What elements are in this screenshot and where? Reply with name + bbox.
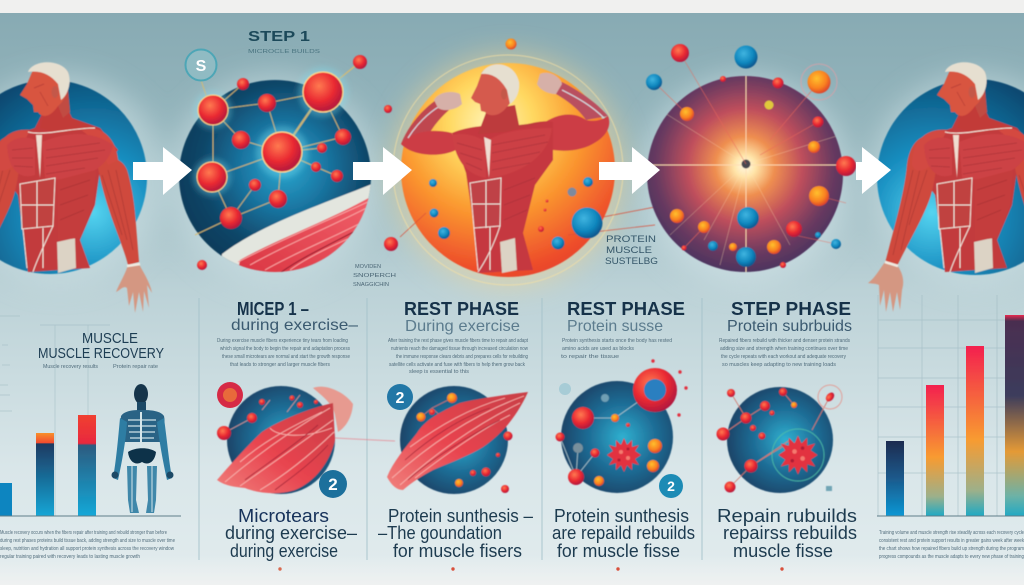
cell circle: [716, 385, 842, 493]
cell circle: [556, 359, 688, 493]
arrow 4: [856, 147, 891, 194]
chart subtitle: Protein repair rate: [113, 364, 158, 370]
text: protein label: [605, 234, 658, 266]
caption: during exercise: [230, 541, 338, 561]
arrow 2: [353, 147, 412, 195]
body text: nutrients reach the damaged tissue through increased circulation now: [391, 346, 528, 352]
icon: number badge: 2: [667, 478, 675, 494]
grid: [0, 316, 110, 516]
caption: [378, 506, 533, 561]
text: small label under network: [353, 264, 396, 288]
panel: burst circle with proteins: [646, 44, 856, 272]
dot: [451, 567, 455, 571]
left flexed arm: [401, 92, 462, 155]
subheading: Protein subrbuids: [727, 318, 852, 335]
caption: Repain rubuilds: [717, 506, 857, 526]
body text: that leads to stronger and larger muscle fibers: [230, 362, 330, 368]
text: small label under network: SNAGGICHIN: [353, 282, 389, 288]
caption: Protein sunthesis –: [388, 506, 533, 526]
caption: during exercise–: [225, 523, 357, 543]
chart notes: regular training paired with recovery leads to lasting muscle growth: [0, 554, 140, 560]
orange ring: [801, 64, 837, 100]
blue circle: [877, 79, 1024, 275]
soft glows: [0, 75, 1024, 285]
heading: REST PHASE: [404, 299, 519, 319]
bottom fade: [0, 555, 1024, 585]
body text: adding size and strength when training continues over time: [720, 346, 848, 352]
nodes: [197, 55, 398, 270]
caption: for muscle fisse: [557, 541, 680, 561]
body text: [217, 338, 350, 368]
panel: right bar chart: [877, 295, 1024, 560]
caption: repairss rebuilds: [723, 523, 857, 543]
icon: number badge: 2: [396, 390, 405, 407]
circle with muscle: [387, 386, 528, 494]
bars: [886, 315, 1024, 516]
panel: left muscular figure: [0, 62, 152, 313]
body text: [561, 338, 672, 360]
body text: During exercise muscle fibers experience tiny tears from loading: [217, 338, 348, 344]
body text: [719, 338, 850, 368]
chart subtitle: Muscle recovery results: [43, 364, 99, 370]
icon: faint badge: [559, 383, 571, 395]
dot: [278, 567, 282, 571]
connecting lines: [195, 62, 360, 235]
panel: flexing figure in orange circle: [393, 38, 655, 285]
icon: red badge: [217, 382, 243, 408]
icon: badge S: S: [196, 58, 207, 75]
floating protein spheres: [400, 38, 655, 250]
body text: After training the rest phase gives muscle fibers time to repair and adapt: [388, 338, 529, 344]
body text: these small microtears are normal and start the growth response: [222, 354, 350, 360]
circle background: [179, 80, 371, 272]
caption: [552, 506, 695, 561]
panel: column micep 1: [217, 299, 395, 571]
muscle slab: [221, 184, 372, 273]
body text: Repaired fibers rebuild with thicker and denser protein strands: [719, 338, 850, 344]
caption: [717, 506, 857, 561]
body text: amino acids are used as blocks: [562, 346, 635, 352]
body text: which signal the body to begin the repair and adaptation process: [220, 346, 350, 352]
body text: Protein synthesis starts once the body has rested: [562, 338, 672, 344]
chart title: MUSCLE: [82, 330, 138, 347]
icon: number badge: [319, 470, 347, 498]
heading: STEP PHASE: [731, 299, 851, 319]
chart notes: [879, 530, 1024, 560]
body text: the immune response clears debris and prepares cells for rebuilding: [396, 354, 528, 360]
panel: step 1 molecule network: [179, 55, 398, 290]
text: small label under network: SNOPERCH: [353, 273, 396, 279]
grid: [878, 295, 1024, 516]
burst disc: [647, 76, 843, 272]
panel: column rest phase two: [552, 299, 695, 571]
axis: [0, 515, 181, 517]
bars: [0, 415, 96, 516]
caption: Protein sunthesis: [554, 506, 689, 526]
chart title: MUSCLE RECOVERY: [38, 345, 164, 362]
panel: left recovery chart: [0, 316, 181, 560]
right flexed arm: [537, 73, 609, 151]
panel: column step phase: [716, 299, 857, 571]
body text: satellite cells activate and fuse with fibers to help them grow back: [389, 362, 525, 368]
body text: to repair the tissue: [561, 354, 619, 360]
icon: badge S: [186, 50, 216, 80]
caption: muscle fisse: [733, 541, 833, 561]
figure: [0, 62, 152, 313]
text: protein label: SUSTELBG: [605, 256, 658, 266]
arrow 3: [599, 147, 660, 194]
neck and head: [471, 64, 545, 134]
circle with torn muscle: [217, 386, 395, 494]
outer ring: [393, 55, 623, 285]
dot: [616, 567, 620, 571]
panel: column rest phase one: [378, 299, 533, 571]
heading: step 1: MICROCLE BUILDS: [248, 49, 320, 55]
node halos: [193, 67, 348, 196]
caption: –The goundation: [378, 523, 502, 543]
spheres: [646, 44, 856, 268]
arrow 1: [133, 147, 192, 195]
axis: [877, 515, 1024, 517]
heading: MICEP 1 –: [237, 299, 309, 319]
caption: Microtears: [238, 506, 329, 526]
heading: step 1: [248, 28, 320, 55]
chart notes: sleep, nutrition and hydration all support protein synthesis across the recovery window: [0, 546, 174, 552]
body text: the cycle repeats with each workout and adequate recovery: [721, 354, 846, 360]
rays: [648, 76, 844, 272]
caption: are repaild rebuilds: [552, 523, 695, 543]
body text: so muscles keep adapting to new training loads: [722, 362, 837, 368]
caption: for muscle fisers: [393, 541, 522, 561]
icon: number badge: [659, 474, 683, 498]
chart title: [38, 330, 164, 362]
chart notes: Muscle recovery occurs when the fibers repair after training and rebuild stronger than before: [0, 530, 167, 536]
dividers: [199, 298, 702, 560]
figure: [868, 62, 1024, 313]
icon: number badge: [387, 384, 413, 410]
leader lines: [654, 53, 846, 248]
blue circle: [0, 80, 147, 274]
subheading: Protein susse: [567, 318, 663, 335]
chart notes: during rest phases proteins build tissue back, adding strength and size to muscle over time: [0, 538, 175, 544]
icon: number badge: 2: [328, 475, 338, 494]
heading: step 1: STEP 1: [248, 28, 310, 45]
torso: [452, 121, 553, 273]
text: protein label: MUSCLE: [606, 245, 652, 255]
body text: [388, 338, 529, 375]
subheading: During exercise: [405, 318, 520, 335]
icon: skeleton figure: [112, 384, 174, 513]
subheading: during exercise–: [231, 317, 358, 334]
body text: sleep is essential to this: [409, 369, 470, 375]
caption: [225, 506, 357, 561]
center dot: [742, 160, 750, 168]
text: protein label: PROTEIN: [606, 234, 656, 244]
chart subtitle: [43, 364, 158, 370]
top glow around flexing figure: [392, 54, 624, 286]
dot: [780, 567, 784, 571]
sun circle: [401, 63, 615, 277]
top strip: [0, 0, 1024, 13]
heading: REST PHASE: [567, 299, 685, 319]
text: small label under network: MOVIDEN: [355, 264, 381, 270]
chart notes: [0, 530, 175, 560]
panel: right muscular figure: [868, 62, 1024, 313]
